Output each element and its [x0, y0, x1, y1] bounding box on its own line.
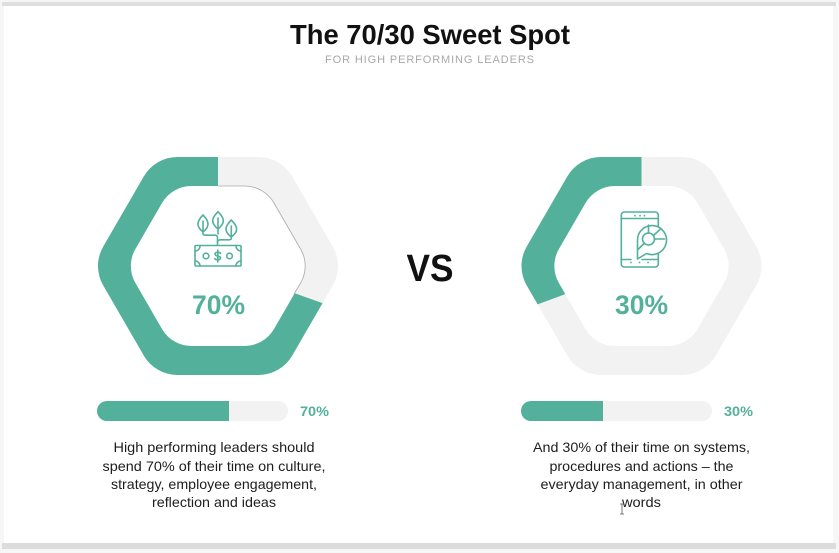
progress bar: 30 percent	[521, 401, 712, 421]
text block: 70 percent description: strategy, employee engagement,	[111, 476, 317, 492]
progress label: 70 percent: 70%	[300, 403, 330, 419]
text block: 70 percent description: spend 70% of their time on culture,	[102, 458, 326, 474]
text block: 70 percent description: reflection and ideas	[152, 494, 276, 510]
progress bar: 70 percent	[97, 401, 288, 421]
text block: 30 percent description: procedures and actions – the	[550, 458, 734, 474]
progress label: 30 percent: 30%	[724, 403, 754, 419]
30 percent value: 30%	[615, 290, 668, 320]
VS label: VS	[406, 248, 454, 290]
text block: 30 percent description: everyday management, in other	[540, 476, 743, 492]
text block: 30 percent description: And 30% of their time on systems,	[533, 439, 750, 455]
70 percent value: 70%	[192, 290, 245, 320]
text block: 30 percent description	[533, 439, 750, 510]
subtitle: FOR HIGH PERFORMING LEADERS	[325, 54, 534, 66]
icon: text cursor	[620, 504, 624, 514]
icon: money plant	[195, 212, 241, 266]
title: The 70/30 Sweet Spot	[290, 19, 570, 50]
icon: phone with pie chart	[621, 212, 666, 267]
text block: 70 percent description: High performing leaders should	[114, 439, 314, 455]
text block: 30 percent description: words	[621, 494, 661, 510]
text block: 70 percent description	[102, 439, 326, 510]
panel: 30 percent hexagon ring	[522, 157, 761, 375]
panel: 70 percent hexagon ring	[98, 157, 338, 375]
